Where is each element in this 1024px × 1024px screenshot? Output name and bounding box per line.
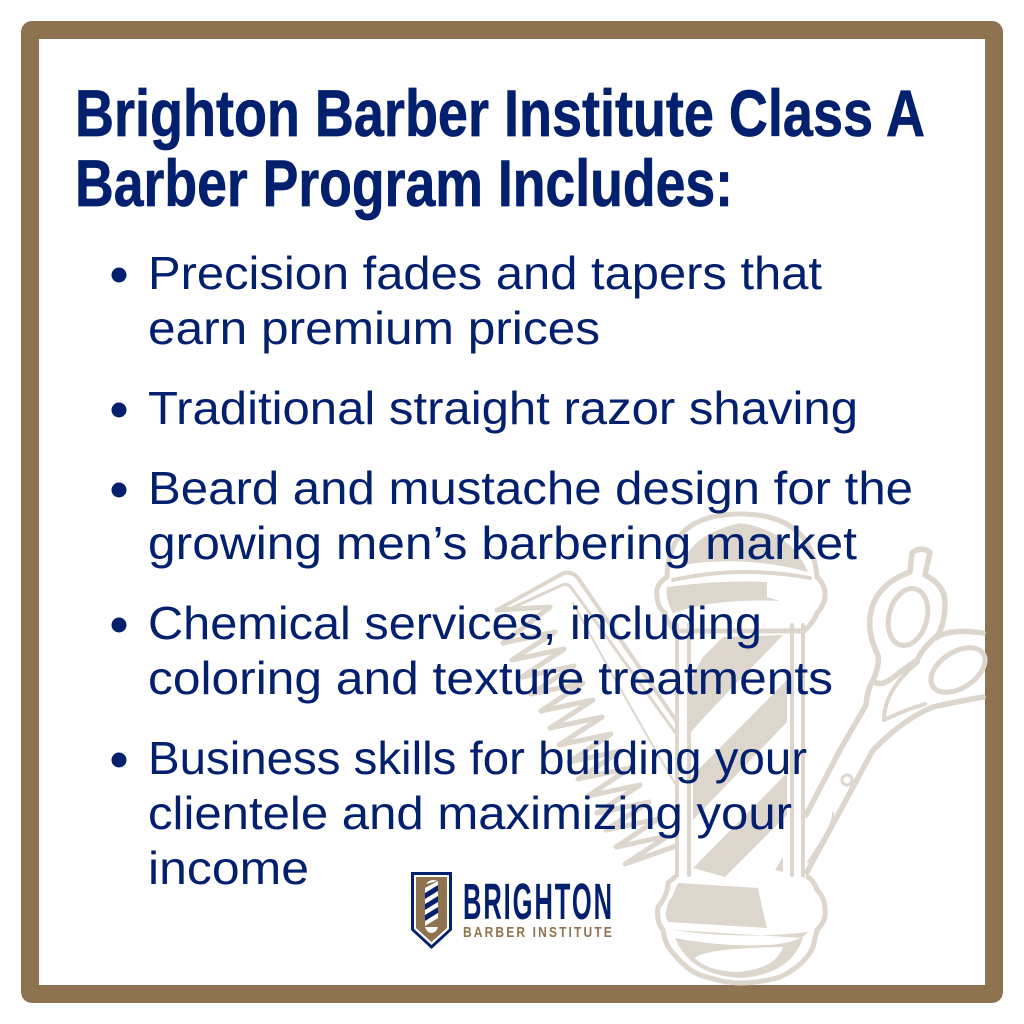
logo wordmark: BRIGHTON — [463, 873, 612, 930]
bullet 4: coloring and texture treatments — [148, 652, 833, 704]
bullet 5 — [112, 732, 807, 894]
title: Barber Program Includes: — [75, 146, 733, 220]
bullet 5: income — [148, 842, 309, 894]
logo: Brighton Barber Institute — [411, 872, 612, 949]
bullet 3 — [112, 462, 913, 569]
bullet 5: clientele and maximizing your — [148, 787, 792, 839]
pole top collar — [657, 577, 825, 631]
bullet 5: Business skills for building your — [148, 732, 807, 784]
bullet 4: Chemical services, including — [148, 597, 762, 649]
icon: scissors — [806, 549, 993, 872]
bullet 2: Traditional straight razor shaving — [148, 382, 858, 434]
icon: barber pole — [657, 514, 825, 983]
icon: shield with pole — [411, 872, 452, 949]
watermark: barber tools — [497, 514, 993, 983]
pole dome — [667, 514, 817, 577]
pole base — [658, 877, 825, 983]
bullet 1 — [112, 247, 822, 354]
bullet 1: earn premium prices — [148, 302, 600, 354]
pole stripes — [690, 635, 787, 877]
logo subtitle: BARBER INSTITUTE — [463, 924, 612, 940]
bullet 4 — [112, 597, 833, 704]
bullet 3: Beard and mustache design for the — [148, 462, 913, 514]
bullet 3: growing men’s barbering market — [148, 517, 857, 569]
bullet 1: Precision fades and tapers that — [148, 247, 822, 299]
bullet list — [112, 247, 913, 894]
icon: comb — [497, 573, 677, 864]
title — [75, 76, 925, 220]
